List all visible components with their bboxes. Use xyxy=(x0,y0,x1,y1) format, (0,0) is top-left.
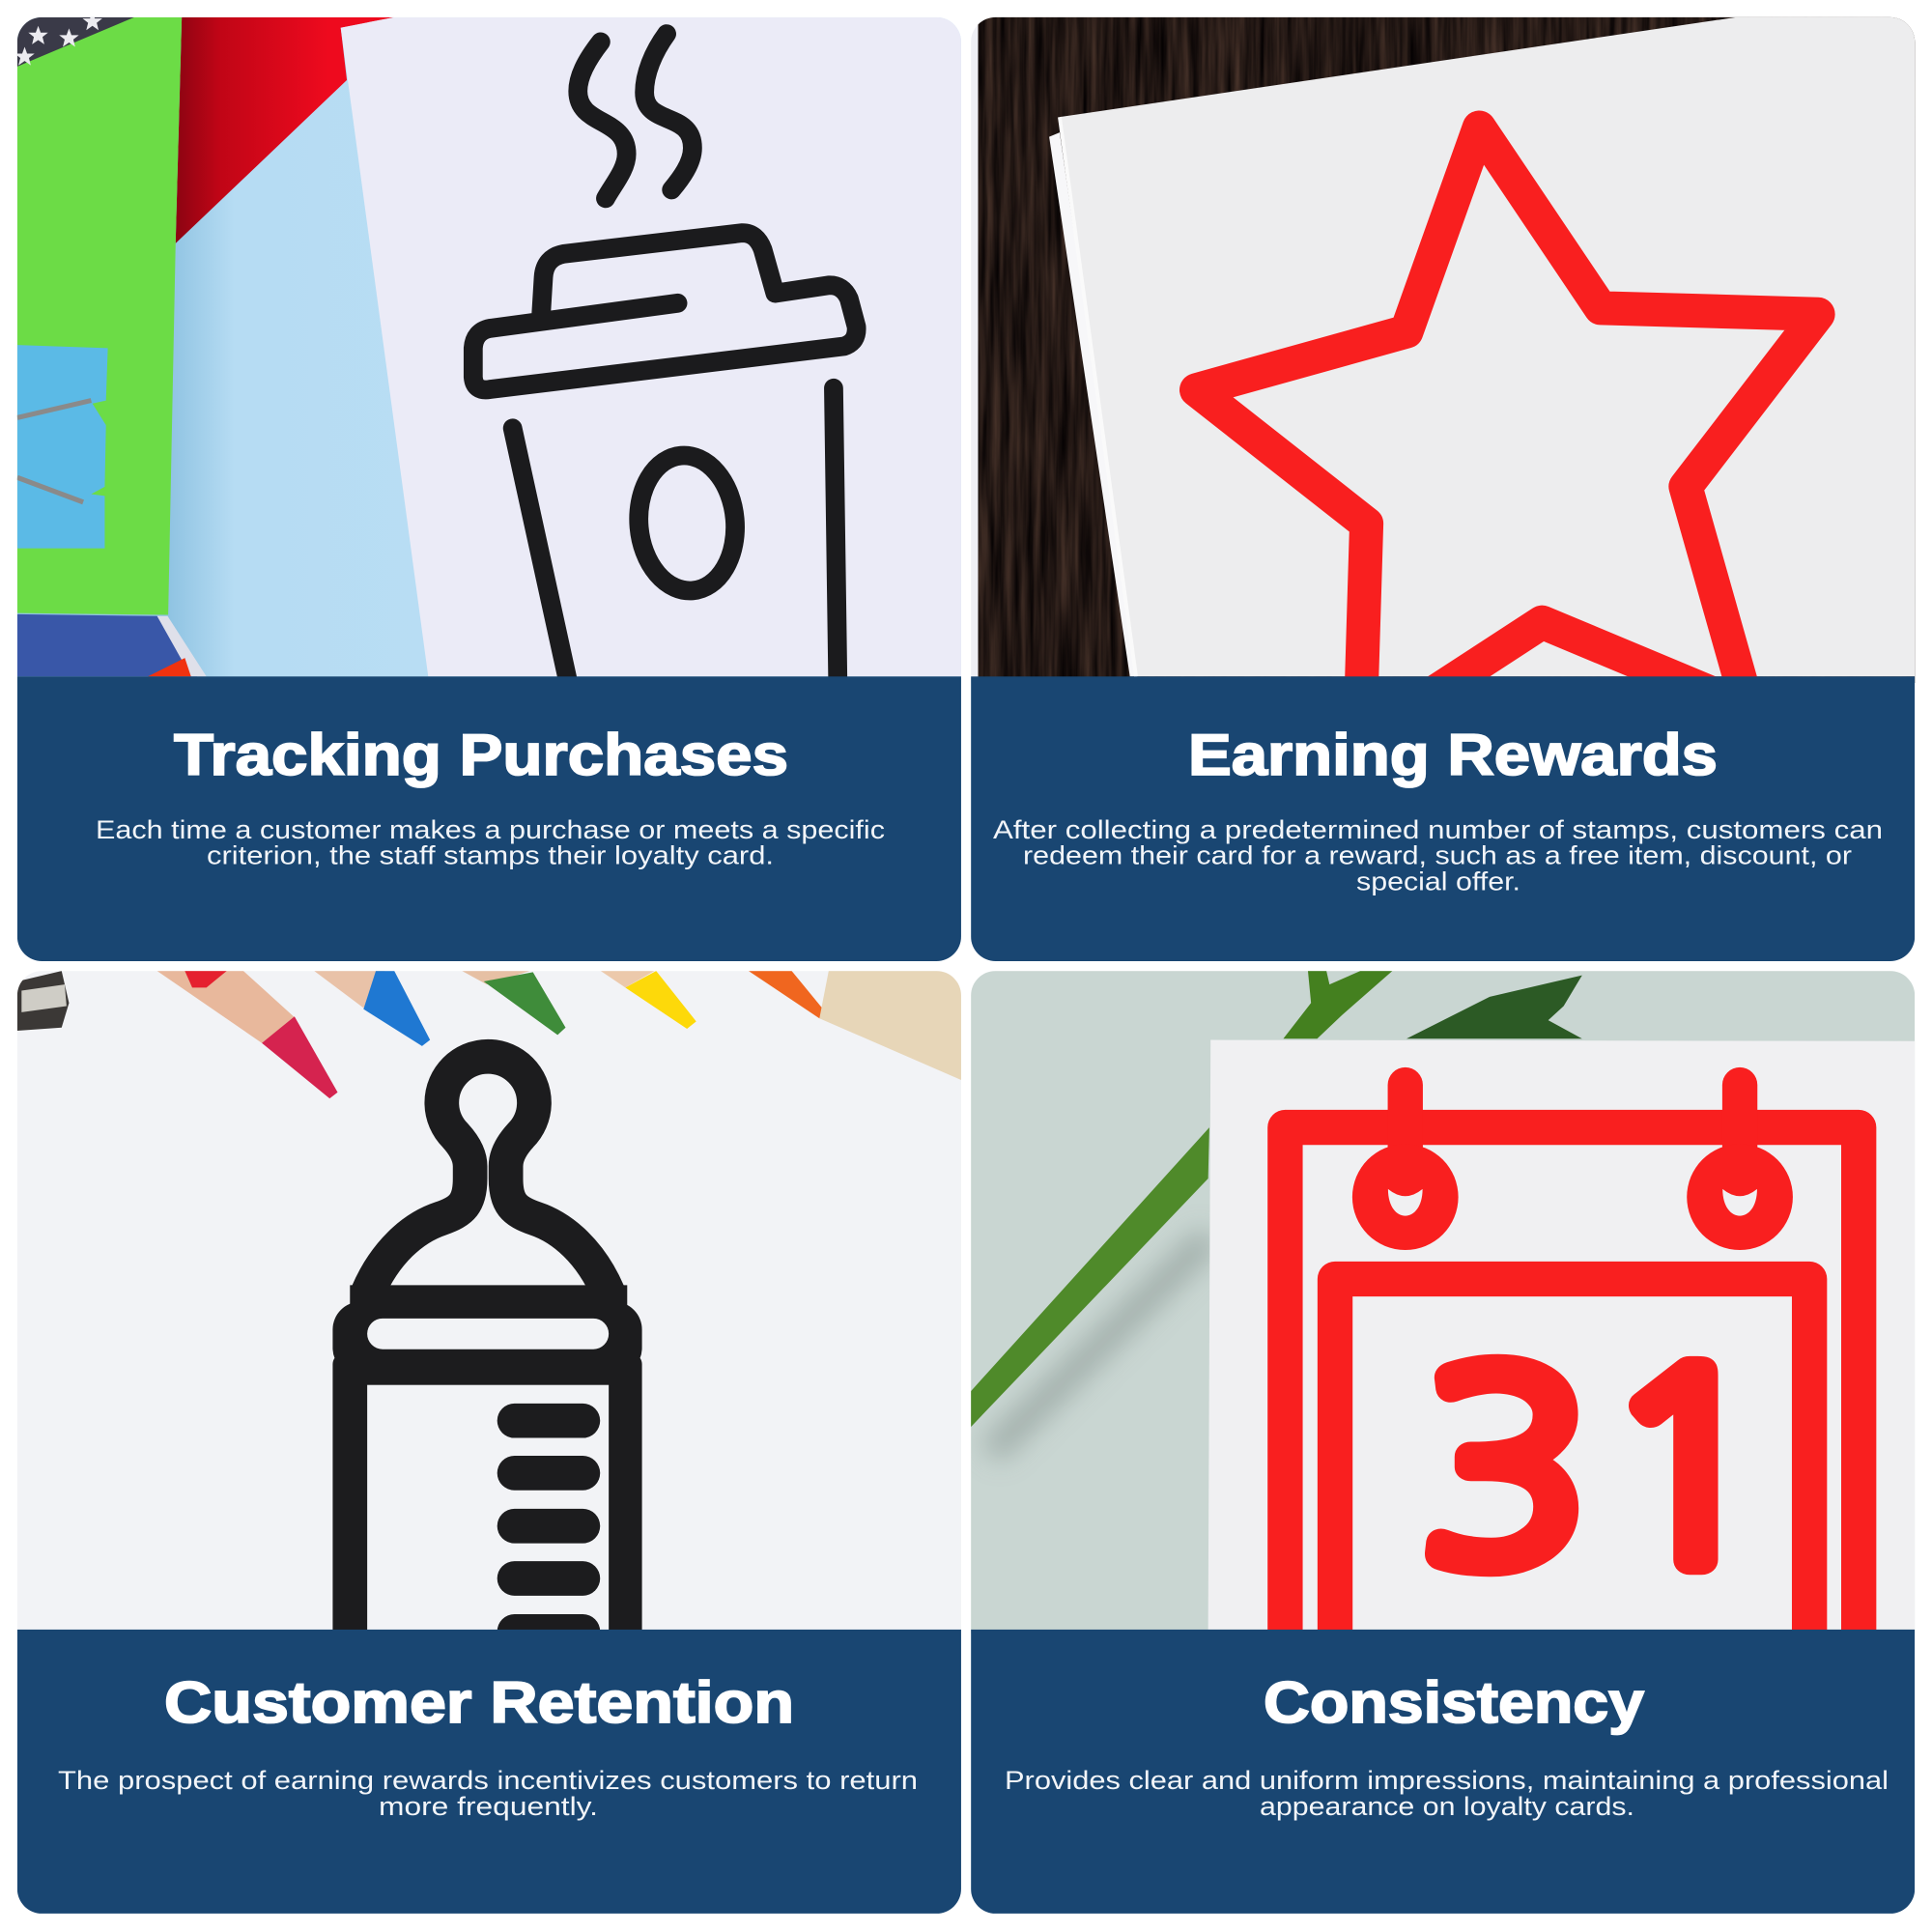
body text: special offer. xyxy=(1356,867,1520,896)
heading: Consistency xyxy=(1264,1670,1645,1735)
body text: criterion, the staff stamps their loyalty card. xyxy=(207,840,774,869)
photo: coffee cup card on stationery xyxy=(14,12,961,690)
panel: tracking purchases xyxy=(14,12,961,966)
heading: Earning Rewards xyxy=(1188,723,1718,787)
body text: Each time a customer makes a purchase or meets a specific xyxy=(96,815,885,844)
caption: earning rewards xyxy=(971,676,1915,966)
body text: Provides clear and uniform impressions, maintaining a professional xyxy=(1005,1766,1889,1795)
icon: calendar xyxy=(1285,1085,1859,1662)
photo: star card on dark wood xyxy=(971,17,1915,727)
icon: calendar: 31 xyxy=(1419,1339,1773,1601)
icon: coffee cup xyxy=(473,34,857,690)
body text xyxy=(58,1766,918,1821)
icon: baby bottle xyxy=(332,1057,642,1649)
body text: appearance on loyalty cards. xyxy=(1260,1792,1634,1821)
binder clip xyxy=(17,345,108,549)
panel: consistency xyxy=(971,971,1915,1919)
body text: redeem their card for a reward, such as a free item, discount, or xyxy=(1023,840,1852,869)
panel: earning rewards xyxy=(971,17,1915,966)
panel: customer retention xyxy=(17,971,961,1919)
body text xyxy=(993,815,1883,896)
caption: consistency xyxy=(971,1630,1915,1919)
body text: After collecting a predetermined number of stamps, customers can xyxy=(993,815,1883,844)
heading: Tracking Purchases xyxy=(174,723,788,787)
body text xyxy=(96,815,885,869)
photo: baby bottle with coloured pencils xyxy=(17,971,961,1649)
body text xyxy=(1005,1766,1889,1821)
caption: customer retention xyxy=(17,1630,961,1919)
icon: star xyxy=(1197,128,1818,727)
body text: more frequently. xyxy=(379,1792,598,1821)
body text: The prospect of earning rewards incentivizes customers to return xyxy=(58,1766,918,1795)
heading: Customer Retention xyxy=(164,1670,794,1735)
caption: tracking purchases xyxy=(17,676,961,966)
photo: calendar card with green stem xyxy=(971,971,1915,1662)
